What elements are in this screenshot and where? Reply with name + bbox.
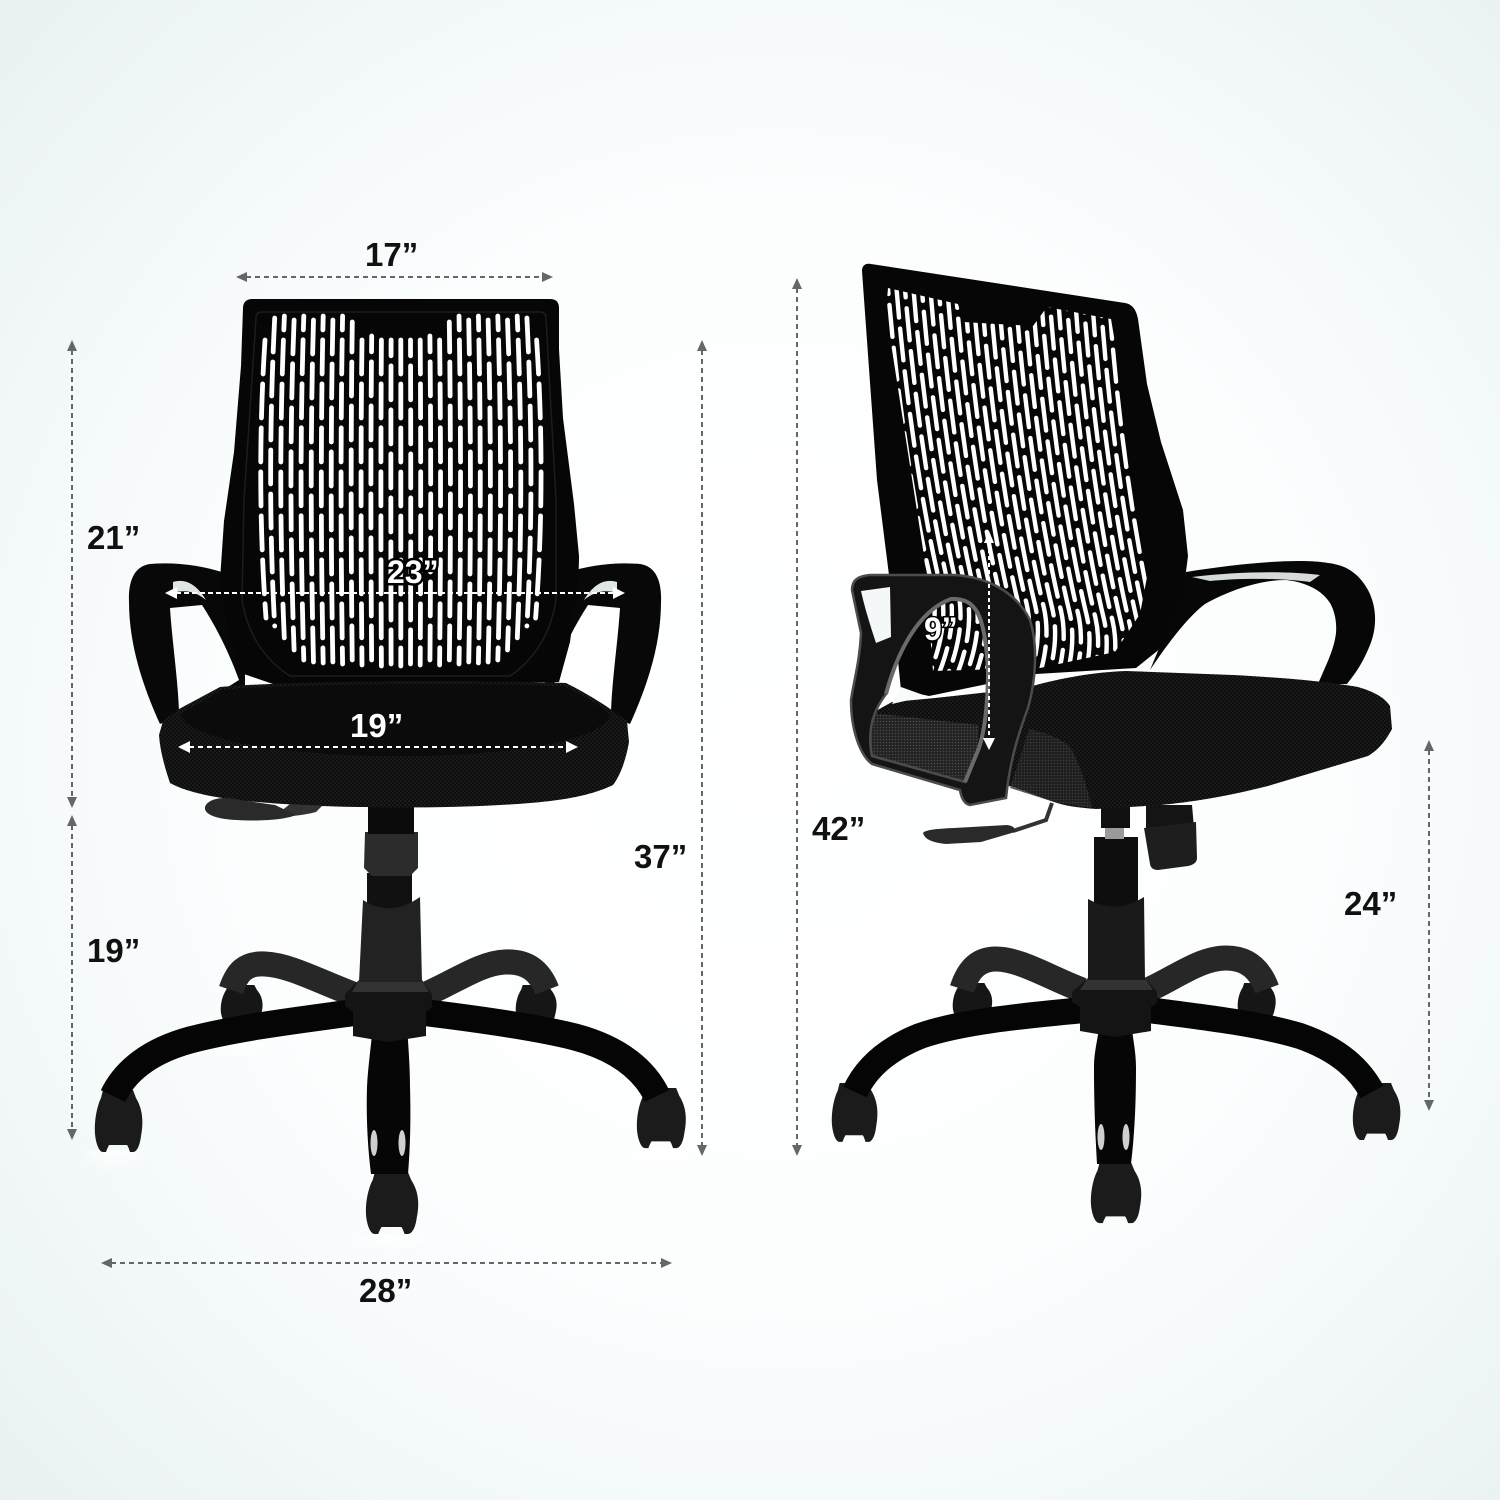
side chair far armrest bbox=[1150, 561, 1375, 684]
side chair far arm slit bbox=[1192, 572, 1320, 582]
dimension: seat height 19 inches: 19” bbox=[87, 932, 140, 969]
front chair front legs bbox=[113, 1012, 657, 1096]
side chair near casters bbox=[832, 1083, 1400, 1223]
front chair column collar bbox=[364, 832, 418, 876]
dimension: depth 9 inches bbox=[924, 531, 995, 750]
dimension: total height 42 inches: 42” bbox=[812, 810, 865, 847]
side chair seat front mesh bbox=[1010, 729, 1092, 808]
front chair rear legs bbox=[231, 962, 547, 996]
side chair far casters bbox=[953, 983, 1276, 1019]
front chair hub bbox=[345, 980, 432, 1042]
front chair upper column bbox=[368, 800, 414, 834]
front chair lever bbox=[205, 798, 322, 820]
dimension: height 37 inches bbox=[634, 340, 707, 1156]
front chair seat cushion bbox=[159, 681, 629, 807]
side chair seat side mesh bbox=[870, 713, 979, 788]
dimension: backrest width 17 inches: 17” bbox=[365, 236, 418, 273]
dimension: arm width 23 inches: 23” bbox=[387, 554, 439, 590]
front chair seat top bbox=[180, 684, 610, 756]
side chair hub bbox=[1072, 978, 1157, 1037]
front chair backrest bbox=[220, 299, 579, 684]
side chair chrome piston bbox=[1105, 826, 1124, 839]
side chair white seat gap bbox=[892, 687, 926, 704]
side chair rear legs bbox=[962, 958, 1267, 990]
side chair lever bbox=[923, 803, 1052, 844]
front chair back panel outline bbox=[242, 312, 556, 676]
front chair back slots bbox=[261, 316, 541, 666]
dimension: back height 21 inches bbox=[67, 340, 140, 808]
side chair tension knob bbox=[1144, 805, 1197, 870]
side chair arm inner rim bbox=[886, 599, 988, 782]
side chair front legs bbox=[855, 1010, 1372, 1092]
side chair arm window bbox=[861, 587, 891, 643]
side chair near armrest bbox=[851, 575, 1035, 805]
front chair right armrest bbox=[545, 563, 661, 724]
front view chair bbox=[85, 299, 690, 1260]
side chair hub band bbox=[1080, 978, 1153, 990]
front chair arm highlights bbox=[173, 581, 617, 600]
side chair centre leg bbox=[1094, 1013, 1136, 1164]
dimension: base width 28 inches bbox=[101, 1258, 672, 1309]
front chair gas column bbox=[367, 873, 412, 913]
side view chair bbox=[832, 262, 1400, 1223]
dimension: back height 21 inches: 21” bbox=[87, 519, 140, 556]
side chair back slots bbox=[887, 288, 1147, 671]
dimension: total height 42 inches bbox=[792, 278, 865, 1156]
dimension: height 37 inches: 37” bbox=[634, 838, 687, 875]
side chair sleeve bbox=[1088, 897, 1145, 980]
front chair left armrest bbox=[129, 563, 245, 724]
dimension: seat width 19 inches: 19” bbox=[350, 707, 403, 744]
front chair centre leg bbox=[367, 1013, 410, 1174]
side chair leg highlights bbox=[1098, 1124, 1130, 1150]
front chair hub band bbox=[352, 980, 429, 992]
dimension: arm width 23 inches bbox=[165, 554, 625, 599]
side chair stem bbox=[1101, 805, 1130, 828]
side chair seat bbox=[870, 671, 1392, 809]
dimension: base width 28 inches: 28” bbox=[359, 1272, 412, 1309]
side chair gas column bbox=[1094, 837, 1138, 912]
front chair leg highlights bbox=[370, 1130, 406, 1156]
front chair rear casters bbox=[221, 985, 557, 1023]
dimension: arm height 24 inches bbox=[1344, 740, 1434, 1111]
side chair backrest bbox=[862, 264, 1188, 696]
dimension: backrest width 17 inches bbox=[236, 236, 553, 282]
front chair floor reflections bbox=[85, 1042, 690, 1260]
front chair sleeve bbox=[359, 897, 422, 982]
front chair front casters bbox=[95, 1088, 686, 1234]
dimension: seat height 19 inches bbox=[67, 815, 140, 1140]
dimension: depth 9 inches: 9” bbox=[924, 611, 958, 647]
dimension: arm height 24 inches: 24” bbox=[1344, 885, 1397, 922]
dimension: seat width 19 inches bbox=[178, 707, 578, 753]
